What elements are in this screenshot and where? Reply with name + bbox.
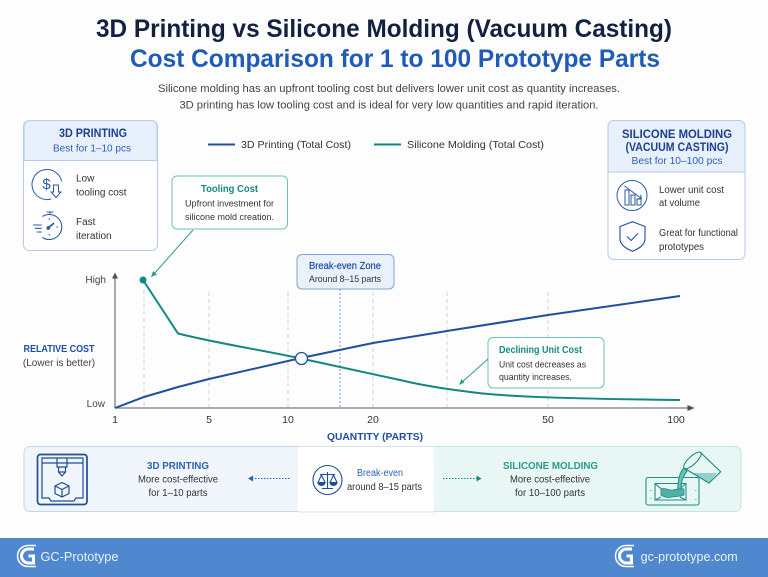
callout: declining unit cost: Unit cost decreases as xyxy=(499,360,586,370)
icon: scales xyxy=(313,466,342,494)
title: 3D Printing vs Silicone Molding (Vacuum Casting) xyxy=(96,15,672,43)
text: lower unit cost: Lower unit cost xyxy=(659,185,724,196)
text: 3D printing summary: for 1–10 parts xyxy=(148,488,208,499)
text: break-even summary: around 8–15 parts xyxy=(347,482,422,493)
callout: break-even zone xyxy=(297,254,394,289)
footer xyxy=(0,538,768,577)
icon: dollar down: $ xyxy=(42,176,51,193)
heading: 3D printing: 3D PRINTING xyxy=(59,128,127,140)
text: 3D printing summary: 3D PRINTING xyxy=(147,460,209,472)
subtitle xyxy=(158,83,620,112)
marker: tooling start xyxy=(140,276,146,284)
text: 3D printing summary xyxy=(138,460,218,499)
heading: silicone molding: (VACUUM CASTING) xyxy=(626,142,729,154)
x labels: 1 xyxy=(112,414,118,426)
callout: tooling cost: Upfront investment for xyxy=(185,198,274,210)
title: Cost Comparison for 1 to 100 Prototype Parts xyxy=(130,45,660,73)
legend: 3D Printing (Total Cost) xyxy=(241,139,351,151)
text: silicone summary: for 10–100 parts xyxy=(515,488,585,499)
title xyxy=(96,15,672,73)
icon: shield xyxy=(620,222,645,251)
callout: declining unit cost: Declining Unit Cost xyxy=(499,345,583,356)
y axis title: (Lower is better) xyxy=(23,358,95,369)
text: low tooling cost: tooling cost xyxy=(76,188,127,198)
text: lower unit cost: at volume xyxy=(659,198,700,209)
text: silicone summary: More cost-effective xyxy=(510,474,590,486)
logo: left xyxy=(18,546,36,566)
brand: right: gc-prototype.com xyxy=(641,550,738,564)
y labels: Low xyxy=(87,399,106,410)
icon: 3D printer xyxy=(38,454,87,504)
icon: bars down xyxy=(617,180,647,210)
chart xyxy=(23,272,694,443)
callout: tooling cost: silicone mold creation. xyxy=(185,212,274,223)
legend: Silicone Molding (Total Cost) xyxy=(407,139,544,151)
axes xyxy=(112,272,694,411)
arrow: left xyxy=(248,476,290,482)
subtitle: 3D printing has low tooling cost and is ideal for very low quantities and rapid iteration. xyxy=(180,100,598,112)
x labels xyxy=(112,414,685,426)
x axis title: QUANTITY (PARTS) xyxy=(327,431,423,443)
line: 3D printing xyxy=(115,296,680,408)
line: silicone molding xyxy=(143,280,680,400)
x labels: 20 xyxy=(367,414,379,426)
heading: silicone molding: SILICONE MOLDING xyxy=(622,129,732,141)
panel: 3D printing xyxy=(24,120,158,250)
text: fast iteration: Fast xyxy=(76,217,96,228)
icon: pouring mold xyxy=(646,450,721,505)
icon: stopwatch xyxy=(33,212,62,240)
text: silicone summary: SILICONE MOLDING xyxy=(503,460,598,472)
logo: right xyxy=(616,546,634,566)
text: break-even summary xyxy=(347,468,422,493)
text: great for functional prototypes: prototypes xyxy=(659,242,704,253)
subheading: best for 10-100: Best for 10–100 pcs xyxy=(632,155,722,167)
y labels xyxy=(85,275,106,410)
x labels: 10 xyxy=(282,414,294,426)
x labels: 50 xyxy=(542,414,554,426)
callout: declining unit cost: quantity increases. xyxy=(499,372,572,383)
arrow: right xyxy=(443,476,482,482)
callout: declining unit cost xyxy=(488,338,604,388)
x labels: 5 xyxy=(206,414,212,426)
callout: break-even zone: Around 8–15 parts xyxy=(309,274,381,285)
callout: break-even zone: Break-even Zone xyxy=(309,261,381,272)
callout: tooling cost: Tooling Cost xyxy=(201,183,258,195)
y axis title: RELATIVE COST xyxy=(24,344,94,355)
arrow: declining unit cost xyxy=(459,359,488,385)
subheading: best for 1-10: Best for 1–10 pcs xyxy=(53,142,131,154)
y axis title xyxy=(23,344,95,369)
text: fast iteration: iteration xyxy=(76,231,112,242)
x labels: 100 xyxy=(667,414,685,426)
text: low tooling cost: Low xyxy=(76,174,95,184)
callout: tooling cost xyxy=(172,176,288,229)
panel: silicone molding xyxy=(608,120,745,260)
brand: left: GC-Prototype xyxy=(40,549,118,564)
marker: break-even xyxy=(296,352,308,364)
summary strip xyxy=(24,446,741,512)
legend xyxy=(208,139,544,151)
text: silicone summary xyxy=(503,460,598,499)
arrow: tooling cost xyxy=(151,230,193,277)
text: break-even summary: Break-even xyxy=(357,468,403,479)
subtitle: Silicone molding has an upfront tooling cost but delivers lower unit cost as quantity increases. xyxy=(158,83,620,95)
y labels: High xyxy=(85,275,106,286)
text: 3D printing summary: More cost-effective xyxy=(138,474,218,486)
text: great for functional prototypes: Great for functional xyxy=(659,228,738,239)
